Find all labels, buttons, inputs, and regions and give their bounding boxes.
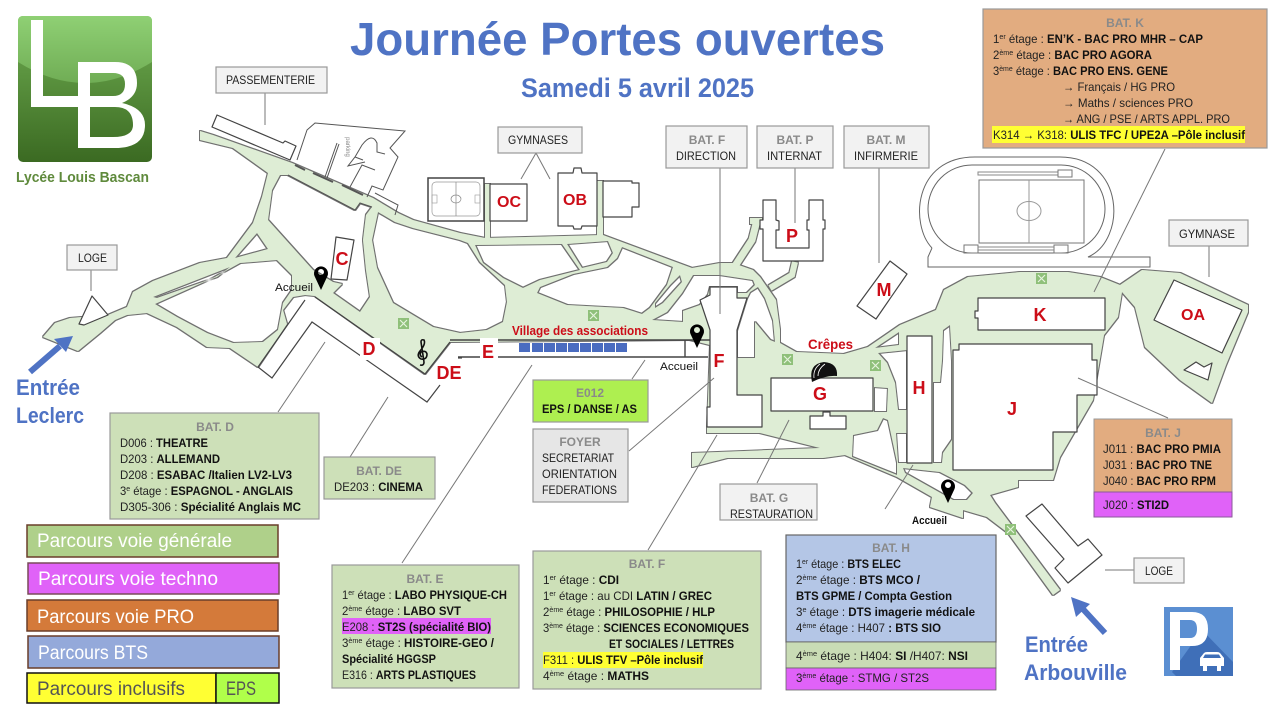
panel: bat F: 3	[543, 621, 550, 635]
panel: bat D: D305-306 : Spécialité Anglais MC	[120, 500, 301, 514]
panel: bat F: LATIN / GREC	[636, 589, 712, 603]
panel: bat E: ème	[348, 636, 362, 645]
logo caption: Lycée Louis Bascan	[16, 169, 149, 186]
panel: bat H: BTS MCO /	[859, 573, 921, 587]
building: passementerie	[212, 115, 296, 160]
panel: bat D: e	[126, 484, 130, 493]
panel: bat K: 2	[993, 48, 1000, 62]
panel: bat F: étage :	[563, 605, 605, 619]
label box: loge Leclerc	[67, 245, 117, 270]
stadium	[920, 157, 1150, 267]
panel: bat J: J040 : BAC PRO RPM	[1103, 474, 1216, 488]
label box: bat P internat: INTERNAT	[767, 149, 823, 163]
parking block	[288, 123, 405, 215]
label box: loge Leclerc: LOGE	[78, 251, 107, 265]
legend: inclusifs and EPS	[27, 673, 279, 703]
panel: bat F: 4	[543, 669, 550, 683]
panel: bat K: 3	[993, 64, 1000, 78]
building letters: DE	[436, 363, 462, 383]
building: loge Arbouville	[1026, 504, 1102, 583]
building: C	[331, 237, 354, 280]
building: K	[975, 298, 1105, 330]
panel: bat H: 2	[796, 573, 803, 587]
label: entrée Leclerc: Entrée	[16, 375, 80, 400]
icon: pin accueil E	[690, 324, 704, 348]
label box: bat G restauration: RESTAURATION	[730, 507, 813, 521]
building: D and DE outline	[258, 297, 462, 402]
building: H	[907, 336, 932, 463]
legend: voie techno: Parcours voie techno	[38, 569, 218, 590]
campus map	[43, 115, 1248, 595]
label box: bat F direction: BAT. F	[689, 133, 725, 147]
panel: bat E: ème	[348, 604, 362, 613]
panel: bat D: étage :	[130, 484, 171, 498]
panel: bat E: E208 : ST2S (spécialité BIO)	[342, 620, 491, 634]
icon: parking	[1164, 607, 1233, 676]
label box: bat P internat: BAT. P	[776, 133, 814, 147]
label box: loge Arbouville	[1134, 558, 1184, 583]
panel: bat H: étage : H407	[816, 621, 888, 635]
building: gymnasium annex	[603, 181, 639, 217]
building: G annex	[810, 412, 846, 429]
panel: bat DE: DE203 : CINEMA	[334, 480, 423, 494]
panel: bat F: er	[550, 573, 557, 582]
panel: foyer	[533, 429, 628, 502]
panel: bat K: BAC PRO AGORA	[1054, 48, 1152, 62]
panel: bat F: étage :	[564, 669, 607, 683]
panel: bat E: 1	[342, 588, 349, 602]
panel: foyer: ORIENTATION	[542, 467, 617, 481]
panel: bat H: SI /H407: NSI	[895, 649, 968, 663]
panel: bat F: PHILOSOPHIE / HLP	[605, 605, 715, 619]
arrow: entrée Arbouville	[1071, 597, 1105, 633]
panel: bat E: 3	[342, 636, 349, 650]
panel: bat H: ème	[802, 621, 816, 630]
arrow: entrée Leclerc	[30, 336, 73, 372]
label: entrée Arbouville	[1024, 632, 1127, 685]
label box: bat G restauration	[720, 484, 817, 521]
panel: bat H	[786, 535, 996, 690]
label box: loge Arbouville: LOGE	[1145, 564, 1173, 578]
label box: gymnase	[1169, 220, 1248, 246]
label: entrée Arbouville: Arbouville	[1024, 660, 1127, 685]
title: Journée Portes ouvertes	[350, 13, 885, 65]
building letters: G	[813, 384, 827, 404]
panel: bat E	[332, 565, 519, 688]
label box: bat M infirmerie: BAT. M	[866, 133, 906, 147]
panel: bat D: D208 : ESABAC /Italien LV2-LV3	[120, 468, 292, 482]
text: parking: parking	[344, 137, 350, 157]
green paths and lawns	[43, 131, 1248, 595]
building: OC	[490, 184, 527, 221]
label box: gymnases	[498, 127, 582, 153]
building: OB	[558, 168, 597, 229]
label box: passementerie: PASSEMENTERIE	[226, 73, 315, 87]
building letters: OA	[1181, 307, 1205, 324]
building letters: OC	[497, 194, 521, 211]
building letters: E	[482, 342, 494, 362]
building: OA annex	[1184, 362, 1212, 380]
building: J	[953, 344, 1097, 470]
panel: bat F	[533, 551, 761, 689]
panel: bat K: → Français / HG PRO	[1063, 80, 1175, 94]
panel: foyer: FOYER	[559, 435, 601, 449]
panel: bat H: : BTS SIO	[888, 621, 941, 635]
panel: bat H: étage : H404:	[817, 649, 895, 663]
panel: bat H: ème	[803, 573, 817, 582]
panel: bat H: étage :	[808, 557, 847, 571]
panel: bat D: ESPAGNOL - ANGLAIS	[171, 484, 293, 498]
panel: bat H: BTS ELEC	[847, 557, 901, 571]
panel: bat J: J020 : STI2D	[1103, 498, 1169, 512]
label box: bat P internat	[757, 126, 833, 168]
panel: bat K: er	[999, 32, 1006, 41]
panel: bat E: BAT. E	[406, 572, 444, 586]
panel: bat K: 1	[993, 32, 1000, 46]
legend: BTS	[28, 636, 279, 668]
panel: bat E: 2	[342, 604, 349, 618]
panel: bat J: BAT. J	[1145, 426, 1181, 440]
panel: bat D	[110, 413, 319, 519]
panel: bat E: er	[348, 588, 355, 597]
building letters: P	[786, 226, 798, 246]
panel: bat K: étage :	[1013, 64, 1053, 78]
building: OA	[1154, 280, 1242, 353]
panel: bat K: K314 → K318: ULIS TFC / UPE2A –Pôle inclusif	[993, 128, 1246, 142]
panel: bat F: ème	[550, 669, 564, 678]
panel: bat H: étage :	[817, 573, 859, 587]
panel: E012: EPS / DANSE / AS	[542, 402, 637, 416]
label: accueil Arbouville: Accueil	[912, 515, 947, 527]
panel: bat H: étage :	[806, 605, 848, 619]
panel: bat J: J031 : BAC PRO TNE	[1103, 458, 1212, 472]
panel: bat H: 4	[796, 649, 803, 663]
label: accueil E: Accueil	[660, 361, 698, 373]
panel: bat E: Spécialité HGGSP	[342, 652, 436, 666]
panel: bat F: BAT. F	[629, 557, 665, 571]
icon: pin accueil Arbouville	[941, 479, 955, 503]
panel: bat D: 3	[120, 484, 127, 498]
label: entrée Leclerc	[16, 375, 84, 428]
panel: bat E: étage :	[362, 604, 403, 618]
panel: bat F: étage :	[563, 621, 603, 635]
panel: bat F: ème	[549, 605, 563, 614]
panel: E012	[533, 380, 648, 422]
panel: bat F: 2	[543, 605, 550, 619]
panel: bat H: 1	[796, 557, 803, 571]
panel: bat H: ème	[802, 671, 816, 680]
label: village des associations: Village des associations	[512, 323, 648, 338]
panel: bat J	[1094, 419, 1232, 517]
legend: voie PRO: Parcours voie PRO	[37, 607, 194, 628]
panel: bat H: e	[802, 605, 806, 614]
panel: bat E: HISTOIRE-GEO /	[404, 636, 495, 650]
panel: bat E: étage :	[362, 636, 404, 650]
logo	[18, 16, 152, 162]
panel: bat E: E316 : ARTS PLASTIQUES	[342, 668, 476, 682]
panel: bat E: LABO PHYSIQUE-CH	[395, 588, 507, 602]
icon: treble clef	[418, 340, 427, 365]
legend	[27, 525, 279, 703]
panel: foyer: FEDERATIONS	[542, 483, 617, 497]
building letters: D	[362, 339, 376, 359]
panel: bat K: → ANG / PSE / ARTS APPL. PRO	[1063, 112, 1230, 126]
building: E	[450, 340, 710, 357]
green map markers	[398, 273, 1047, 535]
building letters: M	[876, 280, 892, 300]
panel: bat H: 4	[796, 621, 803, 635]
panel: bat H: 3	[796, 671, 803, 685]
label box: bat G restauration: BAT. G	[750, 491, 788, 505]
building letters: OB	[563, 192, 587, 209]
panel: bat DE	[324, 457, 435, 499]
panel: bat K: → Maths / sciences PRO	[1063, 96, 1193, 110]
panel: bat H: er	[802, 557, 809, 566]
panel: bat F: étage :	[556, 573, 599, 587]
panel: bat F: MATHS	[607, 669, 649, 683]
panel: bat J: J011 : BAC PRO PMIA	[1103, 442, 1221, 456]
panel: bat DE: BAT. DE	[356, 464, 402, 478]
label box: bat F direction	[666, 126, 747, 168]
panel: bat F: CDI	[599, 573, 619, 587]
panel: bat D: D203 : ALLEMAND	[120, 452, 220, 466]
panel: foyer: SECRETARIAT	[542, 451, 615, 465]
building letters: J	[1007, 399, 1017, 419]
panel: bat H: BTS GPME / Compta Gestion	[796, 589, 952, 603]
panel: bat K: EN’K - BAC PRO MHR – CAP	[1047, 32, 1203, 46]
panel: bat F: ET SOCIALES / LETTRES	[609, 637, 734, 651]
panel: bat F: SCIENCES ECONOMIQUES	[603, 621, 749, 635]
panel: bat K: BAC PRO ENS. GENE	[1053, 64, 1168, 78]
panel: bat K: ème	[999, 64, 1013, 73]
panel: bat K: ème	[999, 48, 1013, 57]
legend: voie générale: Parcours voie générale	[37, 531, 232, 552]
panel: bat H: DTS imagerie médicale	[848, 605, 975, 619]
leader lines	[91, 93, 1209, 570]
label box: gymnase: GYMNASE	[1179, 227, 1235, 241]
legend: voie techno	[28, 563, 279, 594]
panel: bat E: étage :	[354, 588, 395, 602]
legend: inclusifs and EPS: EPS	[226, 679, 256, 700]
building: G	[771, 378, 873, 411]
building letters: H	[912, 378, 926, 398]
panel: bat F: étage : au CDI	[556, 589, 636, 603]
icon: taco	[811, 362, 837, 382]
panel: bat D: D006 : THEATRE	[120, 436, 208, 450]
building letters: K	[1034, 305, 1046, 325]
building: sports field	[428, 178, 484, 221]
panel: bat H: ème	[803, 649, 817, 658]
label box: bat M infirmerie: INFIRMERIE	[854, 149, 918, 163]
panel: bat K: BAT. K	[1106, 16, 1144, 30]
panel: bat K: étage :	[1013, 48, 1054, 62]
panel: bat F: ème	[549, 621, 563, 630]
label: entrée Leclerc: Leclerc	[16, 403, 84, 428]
label: entrée Arbouville: Entrée	[1025, 632, 1088, 657]
label box: bat F direction: DIRECTION	[676, 149, 736, 163]
legend: BTS: Parcours BTS	[38, 643, 148, 664]
legend: inclusifs and EPS: Parcours inclusifs	[37, 679, 185, 700]
legend: voie PRO	[27, 600, 278, 631]
panel: bat D: BAT. D	[196, 420, 234, 434]
building letters	[336, 192, 1205, 419]
label box: passementerie	[216, 67, 327, 93]
panel: E012: E012	[576, 386, 604, 400]
panel: bat H: 3	[796, 605, 803, 619]
panel: bat H: BAT. H	[872, 541, 910, 555]
panel: bat H: étage : STMG / ST2S	[816, 671, 929, 685]
building: loge Leclerc	[79, 296, 108, 325]
label box: bat M infirmerie	[844, 126, 929, 168]
association stands	[519, 343, 627, 352]
subtitle: Samedi 5 avril 2025	[521, 73, 754, 103]
panel: bat K	[983, 9, 1267, 148]
building letters: C	[336, 249, 348, 269]
panel: bat F: er	[549, 589, 556, 598]
building: P	[760, 200, 825, 261]
label: crêpes: Crêpes	[808, 336, 853, 352]
building: F	[700, 287, 762, 427]
panel: bat F: 1	[543, 573, 550, 587]
label: accueil Leclerc: Accueil	[275, 282, 313, 294]
building letters: F	[714, 351, 724, 371]
panel: bat F: 1	[543, 589, 550, 603]
panel: bat K: étage :	[1006, 32, 1047, 46]
panel: bat E: LABO SVT	[403, 604, 462, 618]
label box: gymnases: GYMNASES	[508, 133, 568, 147]
panel: bat F: F311 : ULIS TFV –Pôle inclusif	[543, 653, 704, 667]
building: M	[857, 261, 907, 319]
icon: pin accueil Leclerc	[314, 266, 328, 290]
legend: voie générale	[27, 525, 278, 557]
